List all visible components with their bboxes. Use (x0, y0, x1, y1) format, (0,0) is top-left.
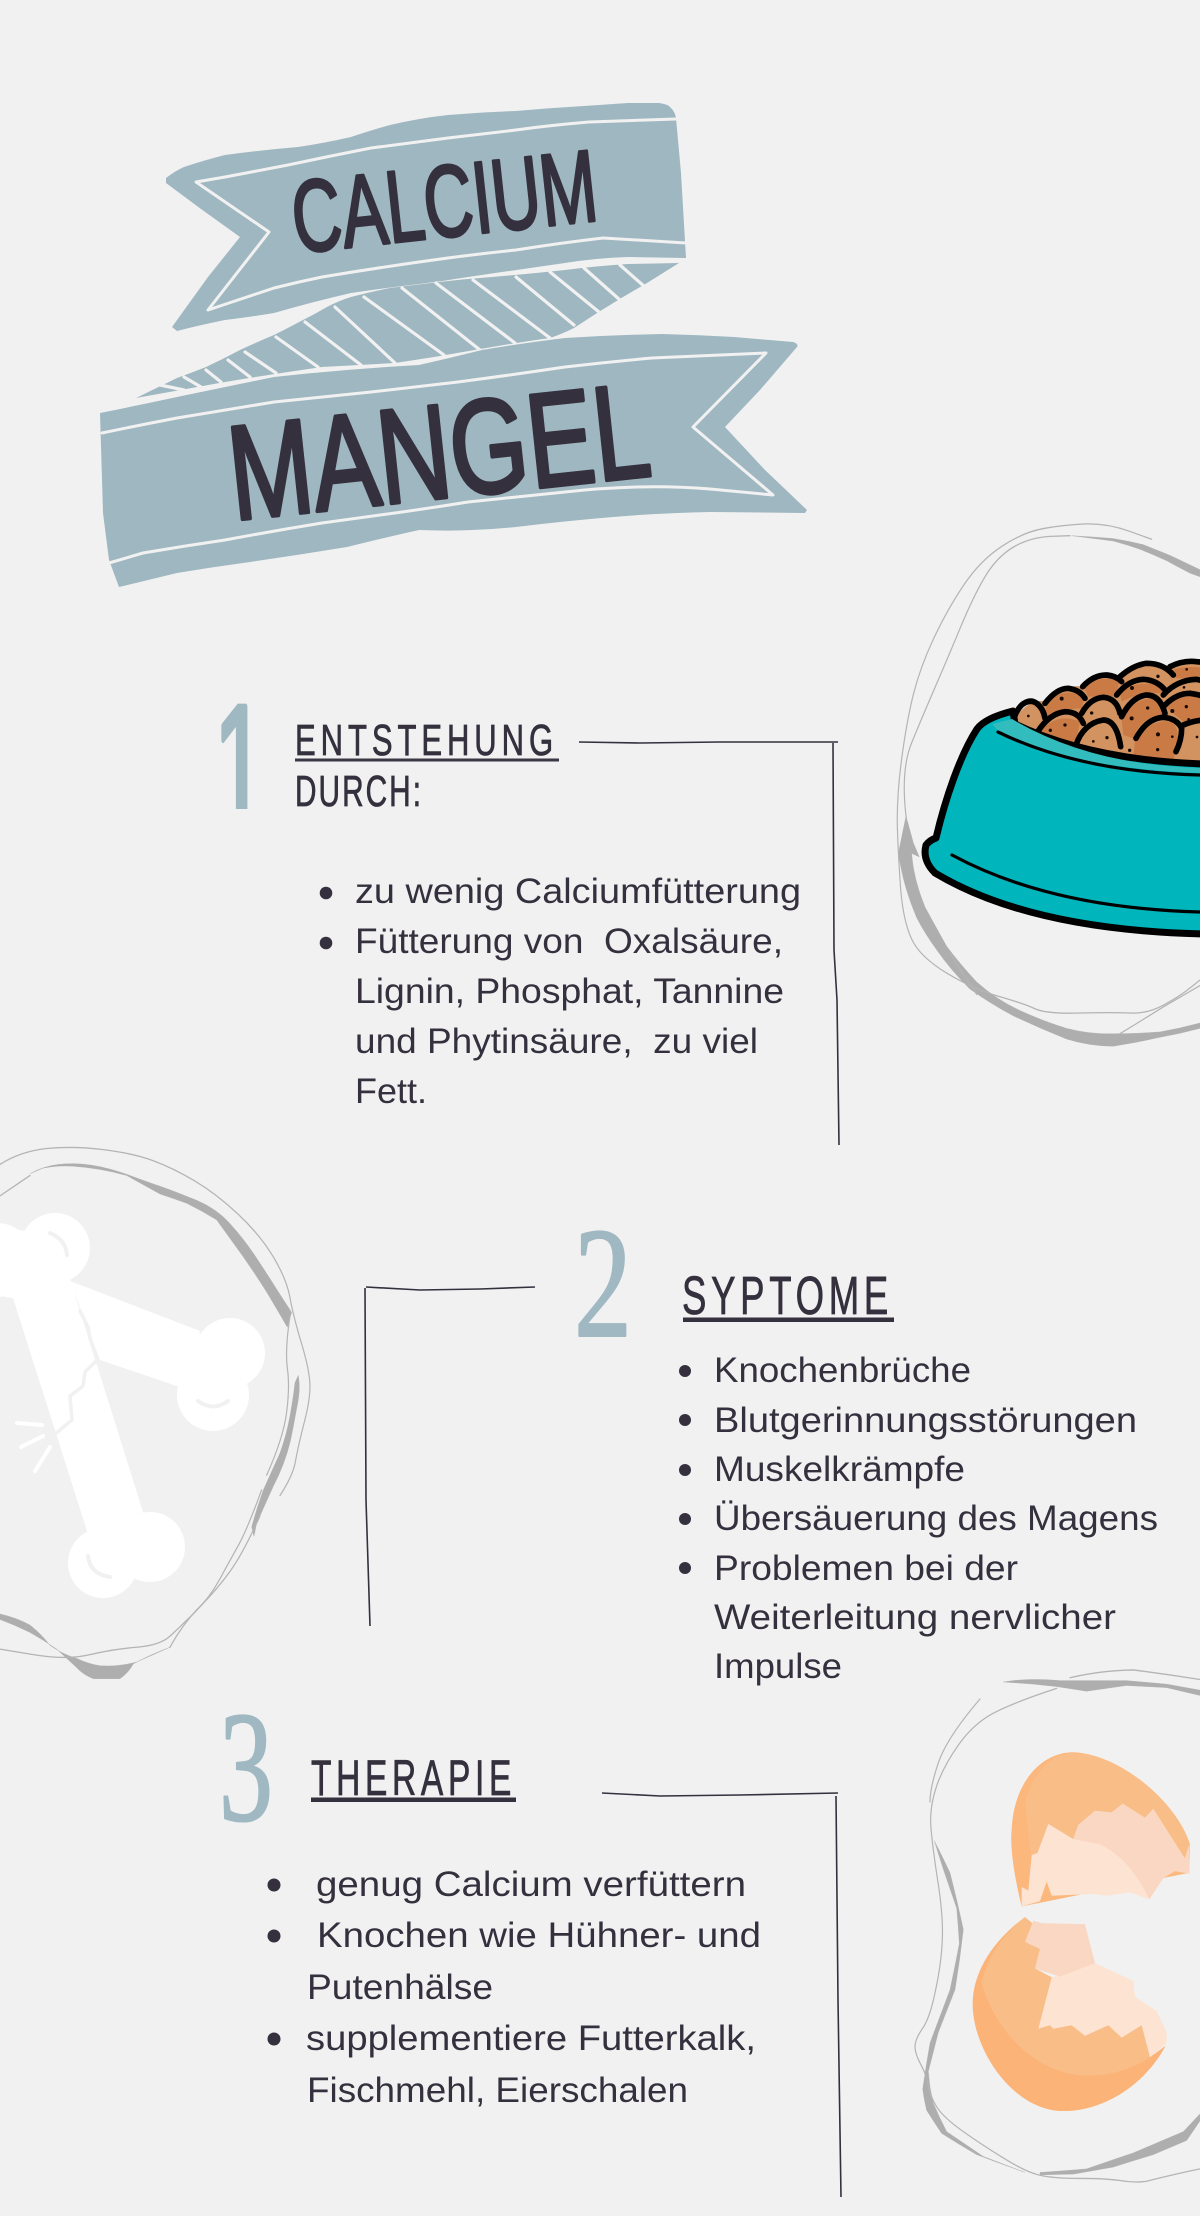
section 3 (219, 1680, 841, 2197)
bowl body (925, 711, 1200, 934)
bullet list: Knochenbrüche (714, 1351, 971, 1390)
scribble circle around bowl (897, 524, 1200, 1046)
bone upper (70, 1281, 265, 1431)
bullet list (679, 1351, 1158, 1686)
upper egg shell (1011, 1752, 1190, 1906)
heading: Entstehung durch (295, 716, 559, 816)
banner fold with stripes (136, 263, 679, 398)
bullet list: und Phytinsäure, zu viel (355, 1022, 758, 1061)
heading: Syptome: SYPTOME (682, 1266, 893, 1326)
bullet list: Fütterung von Oxalsäure, (355, 922, 783, 961)
scribble circle around egg (915, 1670, 1200, 2182)
banner: Mangel (100, 334, 807, 587)
numeral 3: 3 (219, 1680, 273, 1855)
bullet list: genug Calcium verfüttern (316, 1865, 746, 1904)
heading: Syptome (682, 1266, 894, 1326)
food kibble (1012, 661, 1200, 767)
bullet list: Impulse (714, 1647, 842, 1686)
bullet list: Fischmehl, Eierschalen (307, 2071, 688, 2110)
heading: Therapie: THERAPIE (311, 1750, 516, 1806)
heading: Therapie (311, 1750, 516, 1806)
bullet list: Putenhälse (307, 1968, 493, 2007)
section 1 (214, 670, 839, 1145)
heading: Entstehung durch: DURCH: (295, 767, 423, 816)
bracket line (365, 1287, 535, 1626)
bullet list: Fett. (355, 1072, 427, 1111)
numeral 1: 1 (214, 670, 266, 862)
bowl inner lines (952, 732, 1200, 912)
bowl rim highlight (992, 719, 1200, 773)
bone lower (0, 1213, 185, 1598)
bullet list (268, 1865, 761, 2110)
bullet list: Problemen bei der (714, 1549, 1018, 1588)
scribble circle around bone (0, 1147, 310, 1679)
bullet list: Weiterleitung nervlicher (714, 1598, 1116, 1637)
bullet list (320, 872, 801, 1111)
section 2 (365, 1196, 1158, 1686)
bone crack and highlights (17, 1233, 228, 1577)
heading: Entstehung durch: ENTSTEHUNG (295, 716, 558, 765)
bullet list: Übersäuerung des Magens (714, 1499, 1158, 1538)
title banner graphic (100, 103, 807, 587)
title text: CALCIUM: CALCIUM (286, 128, 603, 275)
bullet list: Knochen wie Hühner- und (317, 1916, 761, 1955)
bullet list: Muskelkrämpfe (714, 1450, 965, 1489)
bracket line (579, 742, 839, 1145)
bullet list: zu wenig Calciumfütterung (355, 872, 801, 911)
numeral 2: 2 (574, 1196, 632, 1371)
icon: broken bone in scribbled circle (0, 1147, 310, 1679)
icon: cracked egg in scribbled circle (915, 1670, 1200, 2182)
bullet list: supplementiere Futterkalk, (306, 2019, 756, 2058)
bullet list: Lignin, Phosphat, Tannine (355, 972, 784, 1011)
lower egg shell (973, 1917, 1167, 2111)
bracket line (602, 1793, 841, 2197)
bullet list: Blutgerinnungsstörungen (714, 1401, 1137, 1440)
banner: Calcium (166, 103, 686, 331)
icon: food bowl in scribbled circle (897, 524, 1200, 1046)
title text: MANGEL: MANGEL (221, 356, 657, 549)
